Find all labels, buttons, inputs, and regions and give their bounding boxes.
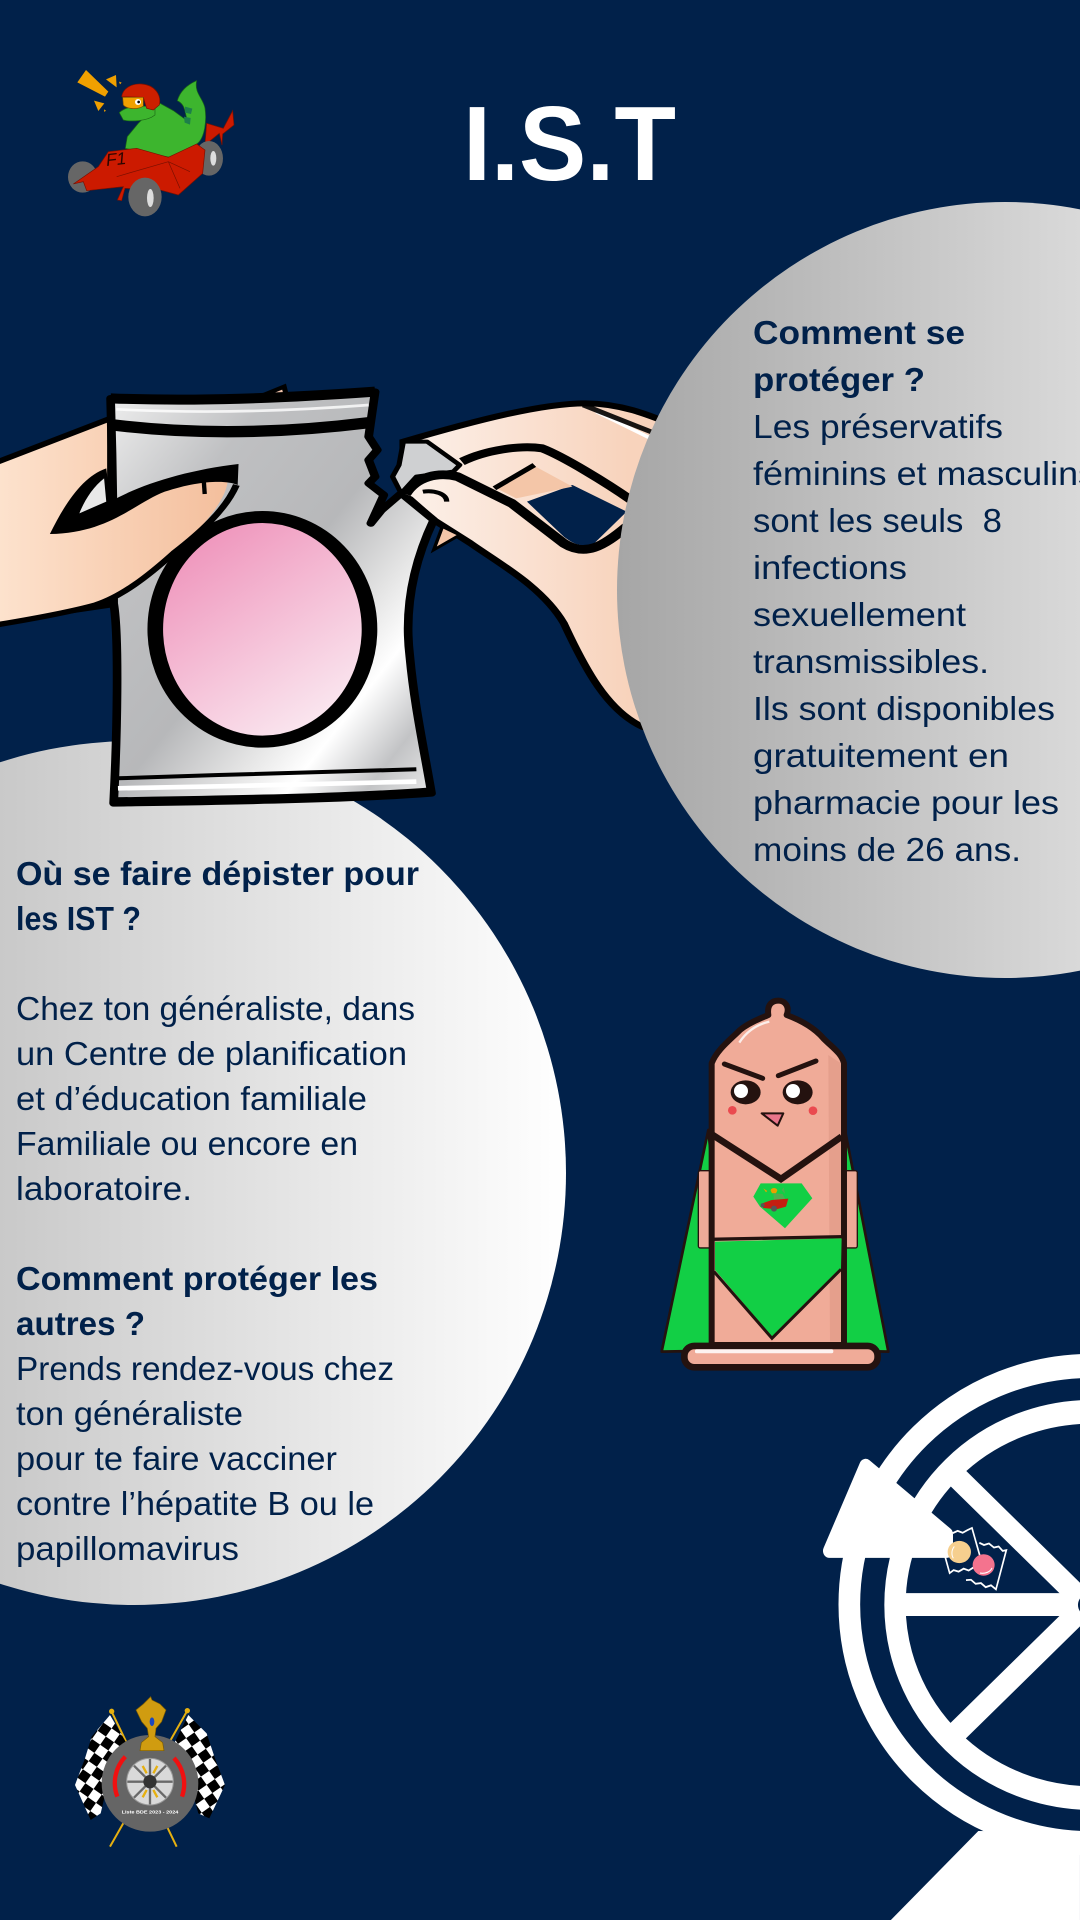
flag poles	[110, 1711, 187, 1847]
illustration: white wheel with arrow	[829, 1366, 1080, 1920]
text block: how to protect yourself: gratuitement en	[753, 737, 1009, 774]
finger behind packet	[247, 387, 288, 403]
illustration: superhero condom mascot	[662, 1001, 888, 1367]
panel: left circle	[0, 741, 566, 1605]
cape	[662, 1130, 888, 1352]
icon: dinosaur in racing car	[68, 70, 234, 216]
text block: where to get tested: un Centre de planification	[16, 1035, 407, 1072]
suit neckline	[713, 1135, 842, 1179]
text block: how to protect others: Comment protéger les	[16, 1260, 378, 1297]
panel: right circle	[617, 202, 1080, 978]
text block: how to protect yourself: sexuellement	[753, 596, 966, 633]
chest emblem	[753, 1183, 812, 1228]
tyre	[102, 1735, 198, 1832]
oval condom window	[155, 517, 370, 742]
wheel stand	[890, 1831, 1080, 1920]
spokes	[897, 1574, 1080, 1636]
text block: where to get tested: Familiale ou encore en	[16, 1125, 358, 1162]
text block: how to protect yourself: transmissibles.	[753, 643, 989, 680]
text block: how to protect yourself: sont les seuls 8	[753, 502, 1002, 539]
green briefs	[715, 1238, 842, 1337]
text block: how to protect yourself: féminins et masculins	[753, 455, 1080, 492]
text block: how to protect yourself: pharmacie pour les	[753, 784, 1059, 821]
text block: where to get tested: laboratoire.	[16, 1170, 192, 1207]
tear flap	[392, 442, 460, 493]
text block: how to protect yourself: protéger ?	[753, 361, 925, 398]
icon: racing crest logo	[75, 1697, 225, 1847]
title: I.S.T	[463, 85, 676, 203]
trophy	[136, 1697, 166, 1751]
text block: how to protect yourself: Ils sont disponibles	[753, 690, 1055, 727]
thumb of right hand	[406, 475, 516, 513]
text block: how to protect others	[16, 1260, 394, 1567]
body	[712, 1001, 844, 1345]
text block: how to protect yourself	[753, 314, 1080, 868]
text block: how to protect yourself: Comment se	[753, 314, 965, 351]
text block: how to protect others: pour te faire vacciner	[16, 1440, 337, 1477]
text block: where to get tested: les IST ?	[16, 900, 141, 937]
text block: how to protect yourself: infections	[753, 549, 907, 586]
text block: where to get tested: et d’éducation familiale	[16, 1080, 367, 1117]
text block: how to protect others: contre l’hépatite B ou le	[16, 1485, 374, 1522]
packet	[111, 392, 434, 803]
text block: where to get tested: Où se faire dépister pour	[16, 855, 419, 892]
inner finger	[497, 467, 572, 498]
arrow pointer	[829, 1466, 947, 1551]
text block: how to protect others: papillomavirus	[16, 1530, 239, 1567]
condom packets	[943, 1528, 1006, 1589]
illustration: hands tearing condom packet	[0, 387, 703, 803]
base ring	[684, 1346, 878, 1367]
rim	[127, 1758, 173, 1805]
face	[724, 1061, 816, 1078]
thumb	[0, 463, 228, 625]
gap between fingers	[527, 485, 627, 545]
text block: how to protect others: Prends rendez-vous chez	[16, 1350, 394, 1387]
icon: dinosaur in racing car: F1	[105, 148, 127, 170]
flags	[75, 1715, 127, 1820]
outer ring	[849, 1366, 1080, 1843]
text block: where to get tested: Chez ton généraliste, dans	[16, 990, 415, 1027]
text block: how to protect yourself: Les préservatifs	[753, 408, 1003, 445]
left hand	[0, 418, 111, 625]
text block: how to protect yourself: moins de 26 ans.	[753, 831, 1021, 868]
inner ring	[895, 1412, 1080, 1798]
right hand	[403, 403, 703, 743]
arms	[698, 1171, 712, 1248]
hub	[1073, 1589, 1080, 1620]
upper finger outline	[462, 447, 631, 500]
tyre label: Liste BDE 2023 - 2024	[122, 1809, 179, 1815]
text block: where to get tested	[16, 855, 419, 1207]
text block: how to protect others: autres ?	[16, 1305, 145, 1342]
text block: how to protect others: ton généraliste	[16, 1395, 243, 1432]
